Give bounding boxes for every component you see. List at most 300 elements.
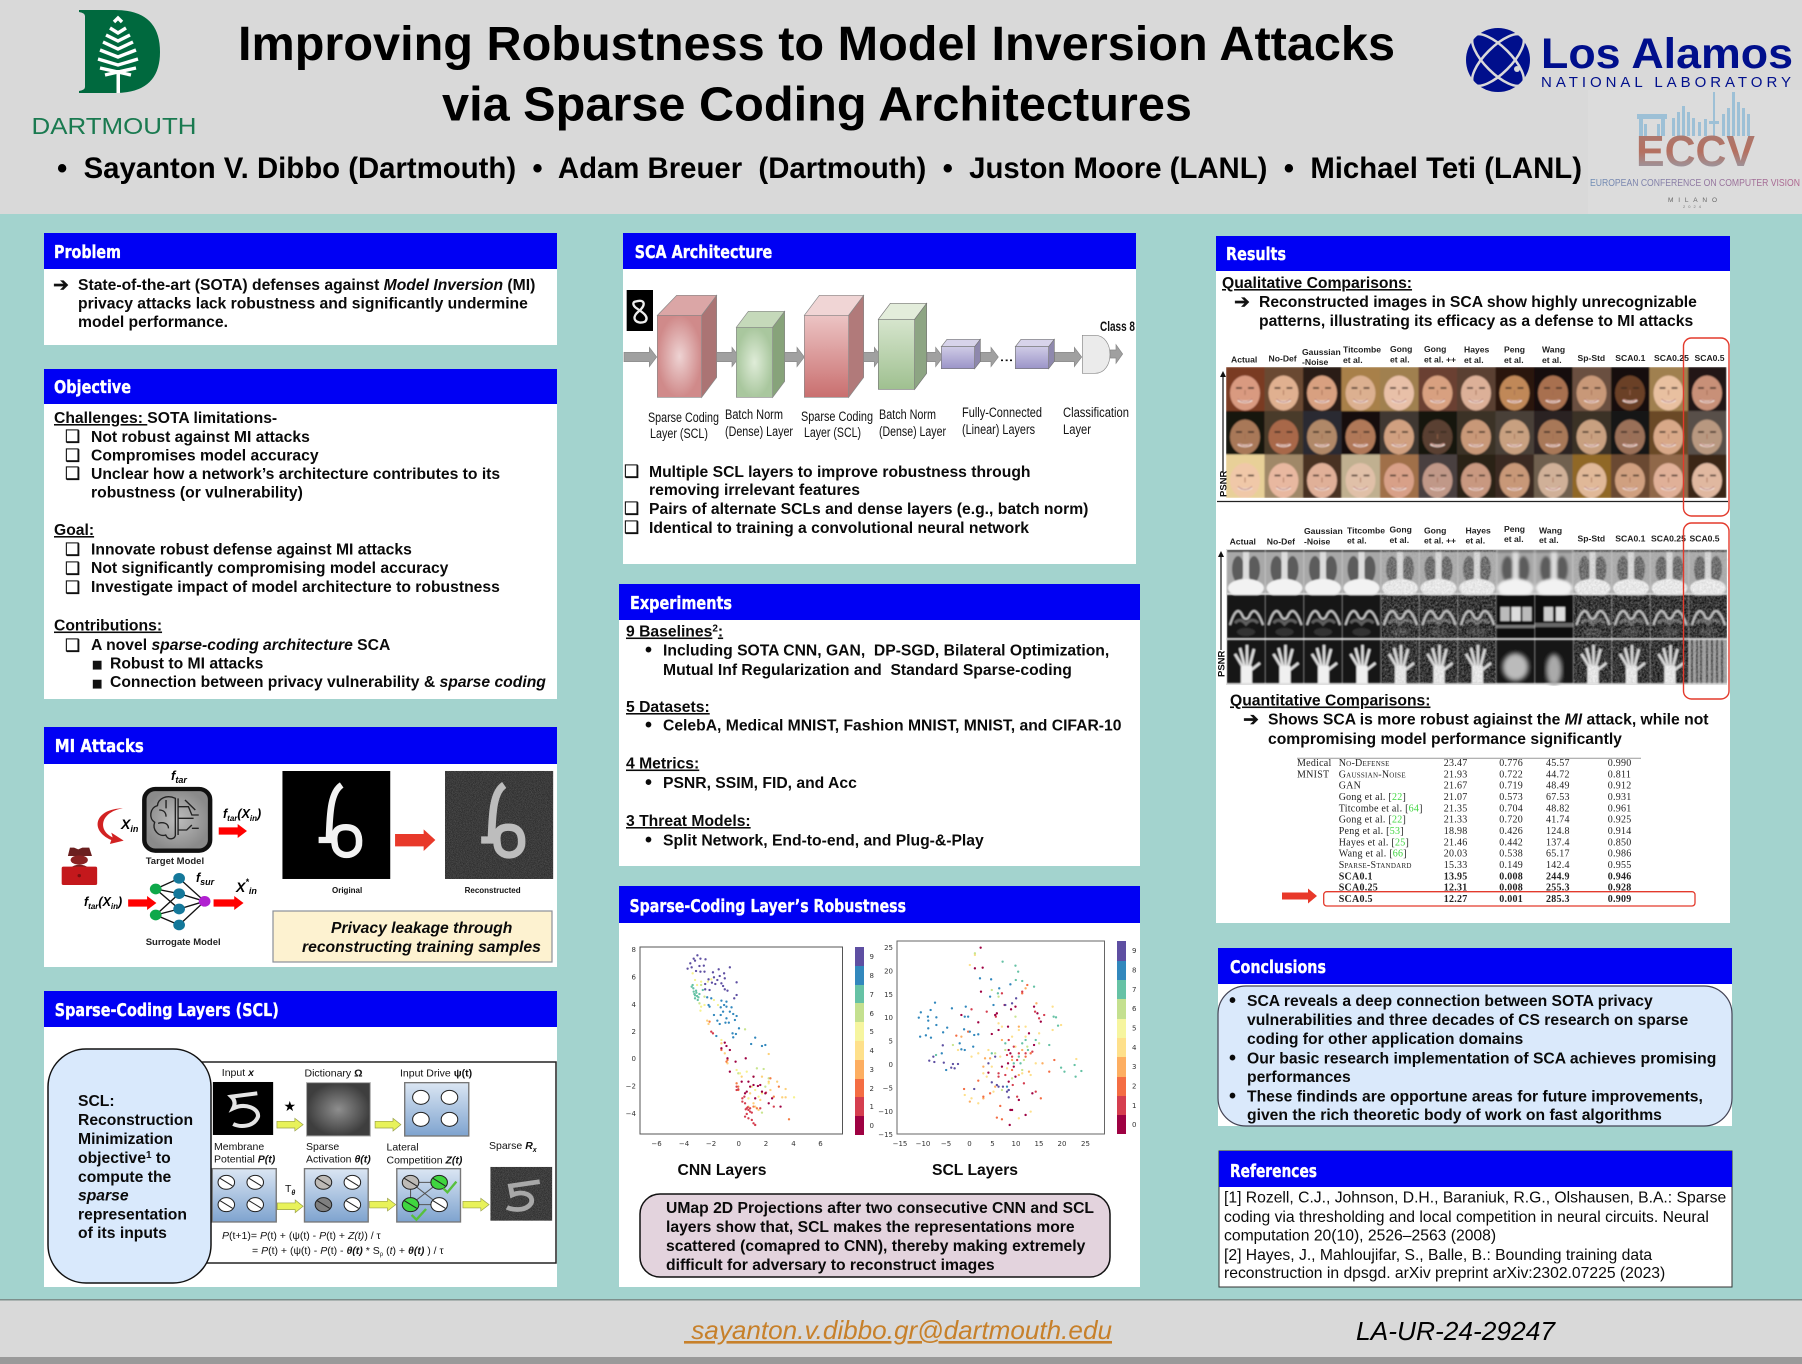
text block: SCA bullets: Identical to training a convolutional neural network <box>649 520 1029 537</box>
labels: layers: Sparse Coding <box>648 410 719 425</box>
label: f tar of X in, right: f <box>223 807 227 821</box>
table: quantitative results: 0.149 <box>1499 860 1523 871</box>
label: f tar of X in, left: in <box>111 902 118 911</box>
axis ticks: CNN: 0 <box>736 1140 741 1148</box>
text block: datasets: • <box>645 714 652 736</box>
text block: datasets <box>626 699 1122 736</box>
label: Input x: Input x <box>222 1067 255 1079</box>
colorbar: SCL: 4 <box>1132 1044 1137 1052</box>
labels: x-ray table columns: et al. <box>1390 535 1409 545</box>
table: quantitative results: 67.53 <box>1546 792 1570 803</box>
colorbar: CNN <box>855 947 874 1135</box>
table: quantitative results: 0.990 <box>1608 758 1631 769</box>
text block: baselines <box>626 624 1109 679</box>
text block: challenges <box>54 410 500 502</box>
callout: UMap note: layers show that, SCL makes the representations more <box>666 1219 1075 1236</box>
labels: layers <box>648 405 1129 441</box>
callout: privacy leakage <box>273 911 552 962</box>
label: X in: in <box>130 824 139 834</box>
table: quantitative results: Peng et al. [53] <box>1339 826 1404 837</box>
label: X star in: * <box>245 877 249 887</box>
colorbar: CNN: 1 <box>870 1103 874 1111</box>
callout: SCL bubble: Reconstruction <box>78 1112 193 1129</box>
label: f tar of X in, right: ) <box>255 807 261 821</box>
label: Sparse Rx: Sparse R <box>489 1140 533 1152</box>
text block: SCA bullets: removing irrelevant features <box>649 482 860 499</box>
callout: conclusions bubble: • <box>1229 1048 1236 1070</box>
logo: Dartmouth: DARTMOUTH <box>32 113 196 139</box>
colorbar: SCL: 9 <box>1132 947 1136 955</box>
image grid: reconstructed faces <box>1226 367 1726 498</box>
data points: CNN <box>688 955 794 1125</box>
axis ticks: SCL: 10 <box>884 1014 893 1022</box>
table: quantitative results: Hayes et al. [25] <box>1339 837 1409 848</box>
chart: surrogate network <box>150 873 210 930</box>
labels: x-ray table columns <box>1230 524 1720 546</box>
panel: Objective <box>44 369 557 699</box>
block: sparse coding layer 2 <box>804 295 864 397</box>
labels: face table columns: et al. <box>1390 354 1410 364</box>
colorbar: SCL <box>1117 941 1137 1134</box>
label: X star in: in <box>249 886 257 896</box>
text block: threat models <box>626 813 984 852</box>
table: quantitative results: 0.909 <box>1608 894 1631 905</box>
colorbar: SCL: 5 <box>1132 1024 1136 1032</box>
labels: x-ray table columns: SCA0.5 <box>1690 534 1720 544</box>
text block: qualitative comparisons: ➔ <box>1234 291 1250 313</box>
callout: SCL bubble: Minimization <box>78 1131 173 1148</box>
axis: x-rays PSNR <box>1216 551 1228 677</box>
text block: contributions: ■ <box>92 677 102 690</box>
text block: references <box>1224 1190 1726 1282</box>
text block: metrics: • <box>645 772 652 794</box>
text block: quantitative comparisons: Quantitative Comparisons: <box>1230 692 1430 710</box>
highlight: SCA0.5 faces column <box>1684 338 1729 516</box>
label: Sparse Activation line 2: Activation θ(t) <box>306 1154 371 1166</box>
table: quantitative results: 12.27 <box>1444 894 1467 905</box>
text block: references: coding via thresholding and local competition in neural circuits. Neural <box>1224 1209 1709 1226</box>
label: CNN Layers: CNN Layers <box>678 1162 767 1179</box>
panel: Conclusions <box>1218 948 1732 1126</box>
axis ticks: SCL: 20 <box>1058 1140 1066 1148</box>
callout: conclusions bubble: Our basic research implementation of SCA achieves promising <box>1247 1050 1716 1068</box>
text block: challenges: robustness (or vulnerability) <box>91 484 303 502</box>
image: sparse reconstruction <box>490 1167 552 1221</box>
equation: P(t+1): P(t+1)= P(t) + (ψ(t) - P(t) + Z(t)) / τ <box>222 1230 382 1242</box>
text block: references: [2] Hayes, J., Mahloujifar, S., Balle, B.: Bounding training data <box>1224 1247 1652 1264</box>
chart: SCL pipeline shapes <box>212 1082 552 1222</box>
labels: face table columns: SCA0.1 <box>1615 353 1646 363</box>
colorbar: SCL: 1 <box>1132 1102 1136 1110</box>
block: classification gate <box>1082 335 1110 373</box>
chart: sparse activation <box>304 1169 368 1222</box>
callout: privacy leakage: Privacy leakage through <box>331 920 512 937</box>
labels: x-ray table columns: et al. <box>1466 536 1485 546</box>
table: quantitative results: 12.31 <box>1444 883 1467 894</box>
footer: email: sayanton.v.dibbo.gr@dartmouth.edu <box>684 1315 1112 1345</box>
label: X in: X <box>121 816 130 832</box>
data points: SCL <box>919 948 1081 1125</box>
table: quantitative results: Medical <box>1297 758 1332 769</box>
axis ticks: SCL: −15 <box>878 1131 893 1139</box>
image grid: reconstructed x-rays <box>1226 549 1728 686</box>
text block: problem statement: State-of-the-art (SOTA) defenses against Model Inversion (MI) <box>78 277 535 294</box>
table: quantitative results: 0.722 <box>1499 769 1523 780</box>
heading: Conclusions: Conclusions <box>1230 958 1326 978</box>
arrows: grey flow <box>624 345 1123 367</box>
label: f tar of X in, right: in <box>250 814 257 823</box>
text block: datasets: 5 Datasets: <box>626 699 710 716</box>
callout: SCL bubble <box>48 1049 211 1283</box>
logo: ECCV: MILANO <box>1668 197 1717 204</box>
callout: conclusions bubble: vulnerabilities and three decades of CS research on sparse <box>1247 1012 1688 1029</box>
label: Sparse Rx: x <box>532 1147 538 1154</box>
block: batch norm 1 <box>736 311 785 397</box>
labels: layers: Batch Norm <box>879 407 936 422</box>
text block: SCA bullets: Pairs of alternate SCLs and dense layers (e.g., batch norm) <box>649 501 1088 518</box>
labels: layers: Fully-Connected <box>962 405 1042 420</box>
label: Target Model: Target Model <box>146 856 204 867</box>
table: quantitative results: 0.928 <box>1608 883 1631 894</box>
equation: expanded: ( <box>383 1245 390 1257</box>
axis ticks: SCL: 10 <box>1012 1140 1020 1148</box>
text block: problem statement: privacy attacks lack robustness and significantly undermine <box>78 296 528 312</box>
text block: baselines: 2 <box>712 624 718 634</box>
text block: contributions: ❑ <box>65 636 80 656</box>
text block: goal: ❑ <box>65 559 80 579</box>
labels: layers: Sparse Coding <box>801 409 873 424</box>
axis: x-rays PSNR: PSNR <box>1216 650 1228 677</box>
label: class 8: Class 8 <box>1100 319 1135 334</box>
labels: face table columns: et al. ++ <box>1424 354 1456 364</box>
axis ticks: SCL: 25 <box>884 944 893 952</box>
table: quantitative results: 0.719 <box>1499 781 1523 792</box>
table: quantitative results: SCA0.1 <box>1339 871 1373 882</box>
text block: baselines: Including SOTA CNN, GAN, DP-SGD, Bilateral Optimization, <box>663 642 1109 660</box>
table: quantitative results: 0.720 <box>1499 815 1523 826</box>
callout: SCL bubble: SCL: <box>78 1093 115 1110</box>
table: quantitative results: 0.986 <box>1608 849 1631 860</box>
axis ticks: CNN: 8 <box>632 946 636 954</box>
chart: architecture diagram <box>624 290 1123 397</box>
table: quantitative results: 23.47 <box>1444 758 1467 769</box>
text block: quantitative comparisons <box>1230 692 1709 748</box>
text block: metrics <box>626 756 857 794</box>
labels: x-ray table columns: Gong <box>1424 526 1446 536</box>
label: X star in: X <box>236 879 245 895</box>
table: quantitative results: 0.776 <box>1499 758 1523 769</box>
callout: conclusions bubble: These findinds are opportune areas for future improvements, <box>1247 1088 1703 1106</box>
text block: challenges: Unclear how a network’s architecture contributes to its <box>91 466 500 483</box>
arrows: yellow flow <box>277 1118 489 1213</box>
table: quantitative results: 0.811 <box>1608 769 1631 780</box>
chart: input drive <box>405 1083 469 1136</box>
text block: SCA bullets: ❑ <box>624 518 639 538</box>
callout: privacy leakage: reconstructing training samples <box>302 939 541 956</box>
labels: face table columns: SCA0.25 <box>1654 353 1689 363</box>
text block: contributions: A novel sparse-coding architecture SCA <box>91 637 390 654</box>
callout: conclusions bubble: SCA reveals a deep connection between SOTA privacy <box>1247 993 1653 1010</box>
labels: x-ray table columns: Gaussian <box>1304 526 1343 536</box>
label: f tar of X in, right: tar <box>227 814 238 823</box>
text block: goal <box>54 522 500 598</box>
labels: face table columns: Gong <box>1390 344 1412 354</box>
axis ticks: CNN: 4 <box>632 1001 637 1009</box>
axis ticks: SCL: −15 <box>893 1140 907 1148</box>
axis ticks: SCL: 0 <box>967 1140 972 1148</box>
colorbar: SCL: 8 <box>1132 966 1136 974</box>
text block: challenges: ❑ <box>65 446 80 466</box>
logo: ECCV: ECCV <box>1636 127 1756 176</box>
table: quantitative results: 0.850 <box>1608 837 1631 848</box>
label: Input Drive: Input Drive ψ(t) <box>400 1068 472 1080</box>
axis ticks: SCL: 5 <box>889 1038 893 1046</box>
labels: x-ray table columns: et al. <box>1347 536 1367 546</box>
colorbar: CNN: 2 <box>870 1085 874 1093</box>
colorbar: SCL: 2 <box>1132 1082 1136 1090</box>
colorbar: CNN: 3 <box>870 1066 874 1074</box>
labels: layers: (Dense) Layer <box>879 424 946 439</box>
table: quantitative results: 65.17 <box>1546 849 1570 860</box>
heading: Objective: Objective <box>54 378 131 398</box>
text block: contributions: Connection between privacy vulnerability & sparse coding <box>110 674 546 691</box>
table: quantitative results: 0.955 <box>1608 860 1631 871</box>
block: linear layer 1 <box>941 339 980 369</box>
block: batch norm 2 <box>878 303 927 389</box>
text block: references: reconstruction in dpsgd. arXiv preprint arXiv:2302.07225 (2023) <box>1224 1265 1665 1282</box>
callout: conclusions bubble: • <box>1229 990 1236 1012</box>
axis ticks: CNN: −6 <box>651 1140 662 1148</box>
table: quantitative results: Gong et al. [22] <box>1339 792 1406 803</box>
labels: face table columns: Gong <box>1424 344 1446 354</box>
labels: x-ray table columns: SCA0.1 <box>1615 534 1646 544</box>
table: quantitative results: 0.914 <box>1608 826 1631 837</box>
text block: goal: Not significantly compromising model accuracy <box>91 560 449 577</box>
table: quantitative results: 0.538 <box>1499 849 1523 860</box>
axis: faces PSNR <box>1217 371 1728 502</box>
callout: conclusions bubble: coding for other application domains <box>1247 1031 1524 1048</box>
axis ticks: CNN: −4 <box>626 1110 637 1118</box>
heading: Sparse-Coding Layers: Sparse-Coding Layers (SCL) <box>55 1001 279 1021</box>
callout: SCL bubble: to <box>152 1150 171 1167</box>
text block: threat models: Split Network, End-to-end, and Plug-&-Play <box>663 832 984 850</box>
table: quantitative results: SCA0.25 <box>1339 883 1378 894</box>
text block: quantitative comparisons: ➔ <box>1243 708 1259 730</box>
colorbar: CNN: 6 <box>870 1010 874 1018</box>
table: quantitative results: 20.03 <box>1444 849 1467 860</box>
text block: metrics: 4 Metrics: <box>626 756 699 772</box>
table: quantitative results: MNIST <box>1297 769 1329 780</box>
text block: references: [1] Rozell, C.J., Johnson, D.H., Baraniuk, R.G., Olshausen, B.A.: Sparse <box>1224 1190 1726 1206</box>
label: f sur: sur <box>200 877 215 887</box>
text block: threat models: • <box>645 830 652 852</box>
chart: CNN layers scatter <box>626 946 874 1148</box>
title: via Sparse Coding Architectures <box>442 78 1192 132</box>
text block: qualitative comparisons <box>1222 275 1697 330</box>
text block: baselines: : <box>718 624 723 640</box>
text block: qualitative comparisons: patterns, illustrating its efficacy as a defense to MI attacks <box>1259 313 1693 330</box>
arrow: target output <box>219 824 247 838</box>
table: quantitative results: 21.93 <box>1444 769 1467 780</box>
arrow: points to SCA0.5 row <box>1282 888 1317 904</box>
table: quantitative results: 0.001 <box>1499 894 1523 905</box>
icon: brain target model <box>144 789 210 851</box>
text block: challenges: Not robust against MI attacks <box>91 429 310 446</box>
colorbar: SCL: 6 <box>1132 1005 1137 1013</box>
labels: x-ray table columns: SCA0.25 <box>1651 534 1686 544</box>
panel: Results <box>1216 236 1730 923</box>
logo: Los Alamos: NATIONAL LABORATORY <box>1541 74 1791 91</box>
heading: Results: Results <box>1226 245 1286 265</box>
labels: face table columns: Hayes <box>1464 345 1490 355</box>
labels: x-ray table columns: Gong <box>1390 525 1412 535</box>
table: quantitative results: 0.442 <box>1499 837 1523 848</box>
table: quantitative results: Gong et al. [22] <box>1339 815 1406 826</box>
panel: Problem <box>44 233 557 345</box>
row highlight <box>1324 892 1695 906</box>
block: linear layer 2 <box>1015 339 1054 369</box>
text block: challenges: Challenges: SOTA limitations- <box>54 410 277 427</box>
text block: goal: Goal: <box>54 522 94 539</box>
ellipsis dots <box>1001 358 1012 363</box>
callout: SCL bubble: compute the <box>78 1169 172 1186</box>
logo: Dartmouth <box>32 10 196 139</box>
label: Sparse Activation: Sparse <box>306 1141 339 1153</box>
table: quantitative results: 21.35 <box>1444 803 1467 814</box>
table: quantitative results: 285.3 <box>1546 894 1570 905</box>
callout: conclusions bubble: performances <box>1247 1069 1351 1086</box>
text block: quantitative comparisons: compromising model performance significantly <box>1268 731 1622 748</box>
axis ticks: CNN <box>626 946 823 1148</box>
axis ticks: SCL: 20 <box>884 968 893 976</box>
labels: face table columns: et al. <box>1343 355 1363 365</box>
text block: SCA bullets: ❑ <box>624 499 639 519</box>
callout: conclusions bubble: • <box>1229 1086 1236 1108</box>
table: quantitative results: 41.74 <box>1546 815 1570 826</box>
logo: ECCV: 2024 <box>1683 204 1702 209</box>
panel: Sparse-Coding Layer's Robustness <box>619 886 1140 1287</box>
arrow: original to reconstructed <box>395 829 435 851</box>
text block: qualitative comparisons: Qualitative Comparisons: <box>1222 275 1412 292</box>
label: SCL Layers: SCL Layers <box>932 1162 1018 1179</box>
arrow: into surrogate <box>128 896 156 910</box>
callout: conclusions bubble: given the rich theoretic body of work on fast algorithms <box>1247 1107 1662 1124</box>
icon: hacker <box>62 848 97 885</box>
text block: SCA bullets <box>624 462 1088 538</box>
table: quantitative results: 0.573 <box>1499 792 1523 803</box>
labels: face table columns: Actual <box>1231 355 1257 365</box>
colorbar: SCL: 3 <box>1132 1063 1136 1071</box>
title: Improving Robustness to Model Inversion Attacks <box>238 18 1395 71</box>
axis ticks: SCL: −5 <box>883 1084 893 1092</box>
text block: problem statement: ➔ <box>53 274 69 296</box>
logo: ECCV <box>1590 92 1800 209</box>
heading: References: References <box>1230 1162 1317 1182</box>
table: quantitative results: 48.49 <box>1546 781 1570 792</box>
text block: challenges: ❑ <box>65 427 80 447</box>
labels: layers: (Dense) Layer <box>725 424 793 439</box>
labels: layers: Layer (SCL) <box>650 426 708 441</box>
label: f tar of X in, right: (X <box>237 807 251 821</box>
heading: Experiments: Experiments <box>630 594 732 614</box>
labels: layers: Layer <box>1063 422 1091 437</box>
panel: SCA Architecture <box>623 233 1136 564</box>
table: quantitative results: 255.3 <box>1546 883 1570 894</box>
axis ticks: CNN: −2 <box>706 1140 716 1148</box>
label: Dictionary: Dictionary Ω <box>304 1068 363 1080</box>
axis ticks: SCL: −10 <box>916 1140 930 1148</box>
footer band <box>0 1299 1802 1364</box>
text block: problem statement: model performance. <box>78 314 228 331</box>
labels: face table columns: Wang <box>1542 345 1565 355</box>
axis ticks: CNN: 0 <box>632 1055 636 1063</box>
table: quantitative results: 45.57 <box>1546 758 1570 769</box>
labels: face table columns: -Noise <box>1302 357 1328 367</box>
axis ticks: SCL: 0 <box>889 1061 893 1069</box>
labels: layers: (Linear) Layers <box>962 422 1035 437</box>
table: quantitative results: Sparse-Standard <box>1339 860 1412 871</box>
icon: digit 8 <box>627 290 653 331</box>
colorbar: SCL: 0 <box>1132 1121 1136 1129</box>
equation: expanded: t) + θ(t) ) / τ <box>390 1245 444 1257</box>
table: quantitative results: Gaussian-Noise <box>1339 769 1406 780</box>
label: Membrane Potential: Membrane <box>214 1141 264 1153</box>
table: quantitative results: 21.67 <box>1444 781 1467 792</box>
table: quantitative results <box>1297 758 1695 906</box>
labels: face table columns <box>1231 344 1725 367</box>
labels: x-ray table columns: -Noise <box>1304 536 1330 546</box>
labels: face table columns: Peng <box>1504 345 1525 355</box>
table: quantitative results: 15.33 <box>1444 860 1467 871</box>
image: reconstructed digit <box>445 771 553 879</box>
table: quantitative results: 0.008 <box>1499 871 1523 882</box>
axis ticks: SCL: 5 <box>990 1140 995 1148</box>
labels: face table columns: et al. <box>1542 355 1562 365</box>
table: quantitative results: SCA0.5 <box>1339 894 1373 905</box>
axis ticks: CNN: −2 <box>626 1082 636 1090</box>
authors: • Sayanton V. Dibbo (Dartmouth) • Adam Breuer (Dartmouth) • Juston Moore (LANL) • Michael Teti (LANL) <box>57 152 1582 185</box>
chart: SCL pipeline frame <box>190 1062 556 1263</box>
labels: face table columns: Gaussian <box>1302 347 1341 357</box>
callout: conclusions bubble <box>1218 986 1732 1126</box>
label: f tar of X in, left: f <box>84 895 88 909</box>
equation: expanded: ρ <box>380 1252 384 1258</box>
text block: problem statement <box>53 274 535 331</box>
heading: SCA Architecture: SCA Architecture <box>635 243 772 263</box>
labels: face table columns: et al. <box>1464 355 1484 365</box>
axis ticks: SCL: −10 <box>878 1108 893 1116</box>
label: Membrane Potential line 2: Potential P(t) <box>214 1154 276 1166</box>
table: quantitative results: 0.961 <box>1608 803 1631 814</box>
panel: Experiments <box>619 584 1140 866</box>
table: quantitative results: 44.72 <box>1546 769 1570 780</box>
text block: contributions <box>54 618 546 691</box>
text block: goal: Innovate robust defense against MI attacks <box>91 542 412 558</box>
axis ticks: CNN: −4 <box>679 1140 690 1148</box>
text block: quantitative comparisons: Shows SCA is more robust agiainst the MI attack, while not <box>1268 712 1709 728</box>
text block: goal: Investigate impact of model architecture to robustness <box>91 579 500 596</box>
table: quantitative results: 244.9 <box>1546 871 1570 882</box>
colorbar: CNN: 9 <box>870 953 874 961</box>
footer: report number: LA-UR-24-29247 <box>1356 1316 1557 1346</box>
callout: SCL bubble: representation <box>78 1206 187 1224</box>
image: original digit <box>282 771 390 879</box>
table: quantitative results: 0.931 <box>1608 792 1631 803</box>
text block: datasets: CelebA, Medical MNIST, Fashion MNIST, MNIST, and CIFAR-10 <box>663 718 1122 734</box>
labels: x-ray table columns: Peng <box>1504 524 1525 534</box>
table: quantitative results: 0.426 <box>1499 826 1523 837</box>
axis ticks: CNN: 4 <box>791 1140 796 1148</box>
